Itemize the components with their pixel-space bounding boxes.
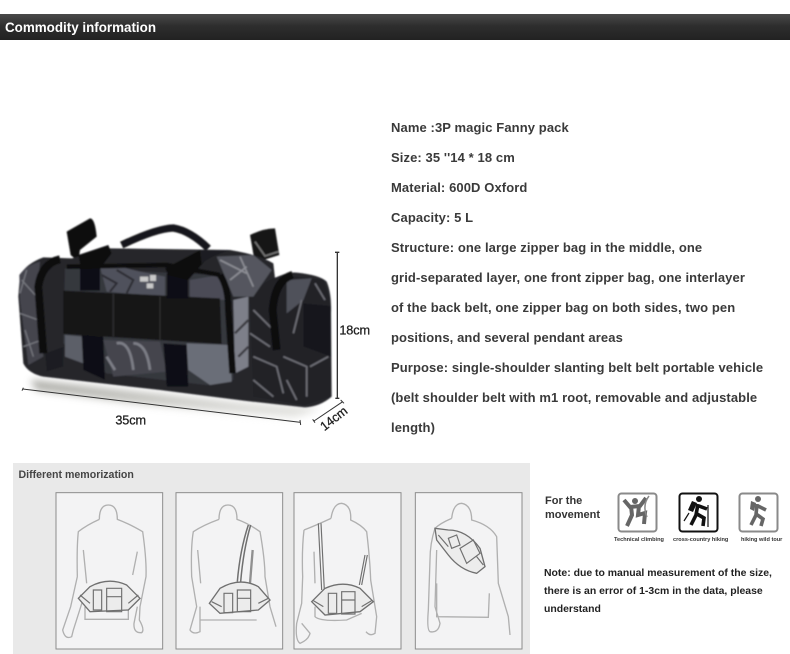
diagram: shoulder strap cross carry (176, 493, 283, 649)
product photo with dimensions (17, 217, 370, 434)
movement label: For the (545, 495, 582, 507)
header title: Commodity information (5, 20, 156, 35)
measurement note: there is an error of 1-3cm in the data, please (544, 586, 763, 597)
bag handle (122, 228, 208, 248)
product specification text: Material: 600D Oxford (391, 180, 527, 195)
movement label: movement (545, 509, 600, 521)
molle webbing (63, 291, 222, 344)
dimension 14cm: 14cm (318, 404, 350, 434)
buckles (78, 245, 112, 268)
icon caption: hiking wild tour: hiking wild tour (741, 537, 782, 543)
icon: cross-country hiking (678, 492, 718, 532)
panel heading: Different memorization (18, 469, 134, 481)
product specification text: positions, and several pendant areas (391, 330, 623, 345)
dimension 18cm: 18cm (339, 324, 370, 338)
measurement note: understand (544, 604, 601, 615)
camouflage left side (19, 262, 43, 365)
wearing diagrams (56, 492, 522, 650)
diagram: chest sling carry (415, 493, 522, 649)
measurement note (544, 568, 772, 615)
camouflage right pocket (250, 275, 330, 405)
diagram: double strap carry (294, 493, 401, 649)
product specification text: Name :3P magic Fanny pack (391, 120, 569, 135)
header bar (0, 14, 790, 40)
product specification text: Capacity: 5 L (391, 210, 473, 225)
product specification text: of the back belt, one zipper bag on both sides, two pen (391, 300, 735, 315)
icon caption: technical climbing: Technical climbing (614, 537, 664, 543)
bag strap loops (67, 218, 97, 262)
camouflage centre panel (63, 268, 233, 385)
measurement note: Note: due to manual measurement of the size, (544, 568, 772, 579)
diagram: waist carry (56, 493, 163, 649)
icon: hiking wild tour (738, 492, 778, 532)
product specification text: Purpose: single-shoulder slanting belt belt portable vehicle (391, 360, 763, 375)
product specification text: grid-separated layer, one front zipper bag, one interlayer (391, 270, 745, 285)
product specification text: Structure: one large zipper bag in the middle, one (391, 240, 702, 255)
product specification text: Size: 35 ''14 * 18 cm (391, 150, 515, 165)
main bag body (18, 248, 332, 407)
zippers (38, 259, 60, 353)
dimension 35cm: 35cm (115, 414, 146, 428)
product specification text: length) (391, 420, 435, 435)
product specification text: (belt shoulder belt with m1 root, removable and adjustable (391, 390, 757, 405)
movement label (545, 495, 600, 521)
icon: technical climbing (618, 492, 658, 532)
icon caption: cross-country hiking: cross-country hiking (673, 537, 728, 543)
dimension 18cm (335, 252, 370, 398)
ground shadow (30, 380, 320, 418)
product specification text (391, 120, 763, 435)
bag (18, 218, 332, 407)
dimension 35cm (22, 388, 301, 428)
panel: carrying styles (13, 463, 530, 654)
